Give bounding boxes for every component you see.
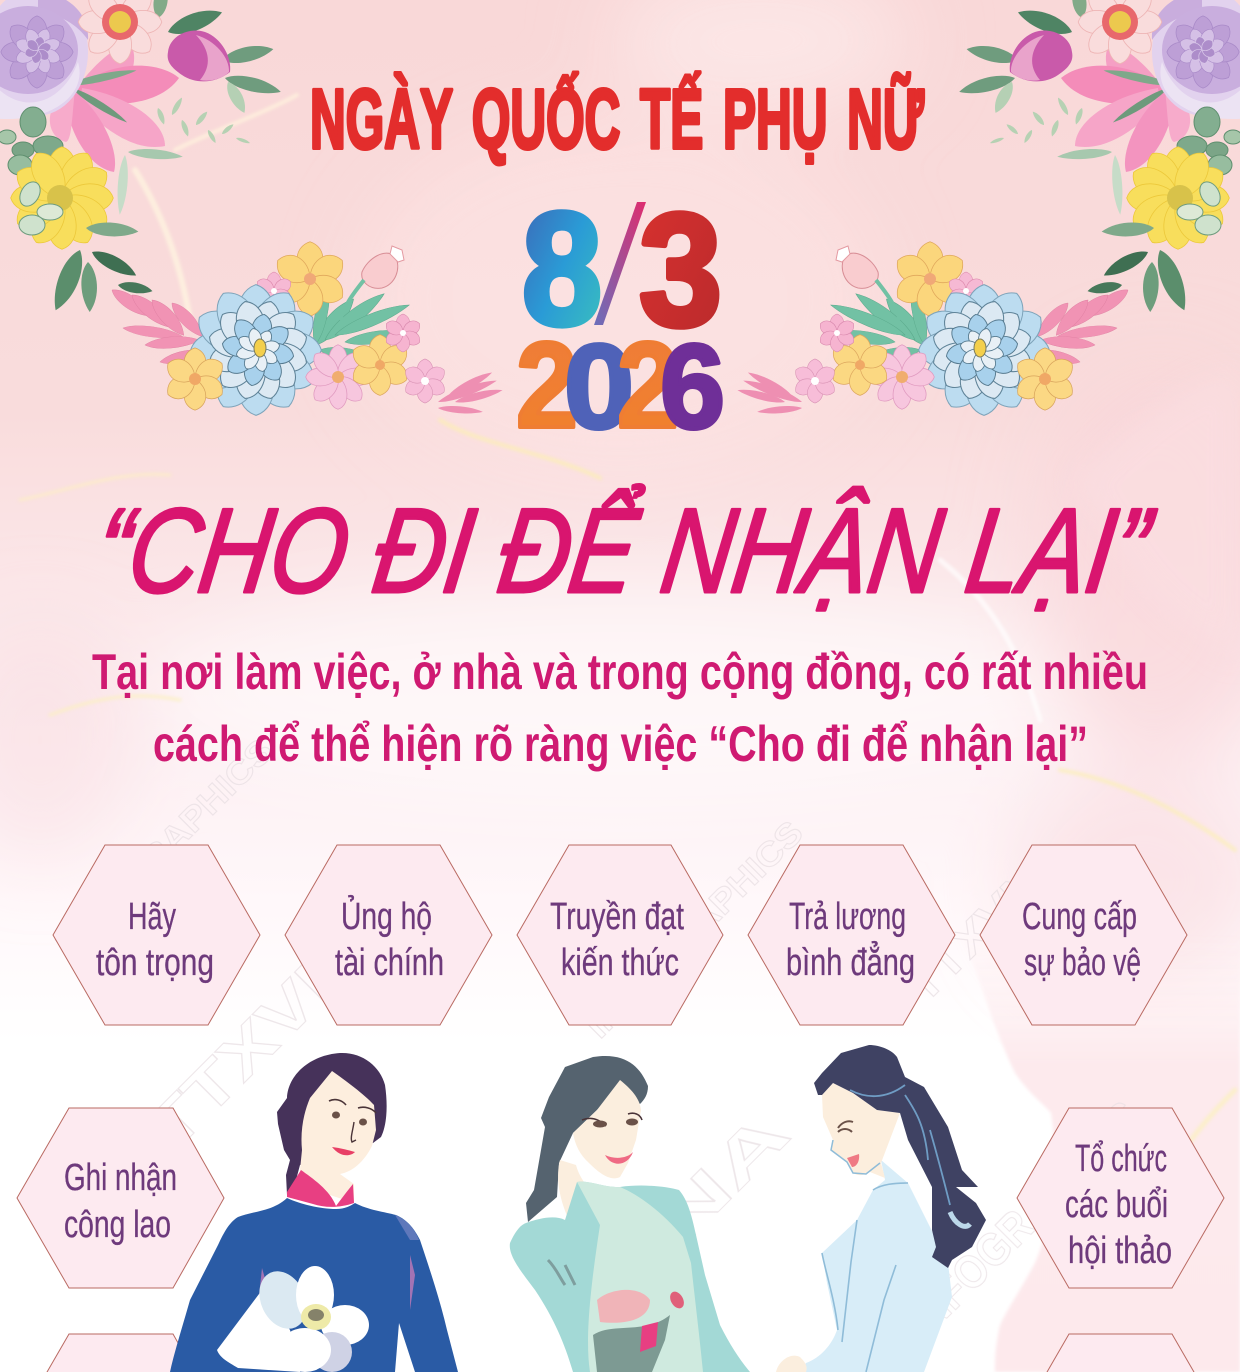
watermarks: TTXVN xyxy=(133,925,373,1165)
hexagon: lower left (cropped) xyxy=(17,1334,224,1372)
hexagon: Tổ chức các buổi hội thảo: các buổi xyxy=(1065,1184,1168,1226)
hexagon: Hãy tôn trọng xyxy=(53,845,260,1025)
hexagon: Tổ chức các buổi hội thảo: hội thảo xyxy=(1068,1230,1172,1272)
soft right blob in lower area xyxy=(960,930,1240,1372)
hexagon: Cung cấp sự bảo vệ: Cung cấp xyxy=(1022,896,1137,938)
floral corner: top right xyxy=(957,0,1240,314)
woman in teal ao dai xyxy=(510,1056,750,1372)
floral bouquet: right xyxy=(737,242,1132,416)
date emblem: 8/3 2026: 6 xyxy=(660,320,725,454)
hexagon: Ghi nhận công lao xyxy=(17,1108,224,1288)
hexagon: Trả lương bình đẳng: bình đẳng xyxy=(786,940,915,984)
date emblem: 8/3 2026: 3 xyxy=(639,180,722,359)
hexagon: Ghi nhận công lao: Ghi nhận xyxy=(64,1157,177,1199)
hexagon: Ủng hộ tài chính: Ủng hộ xyxy=(341,894,432,938)
hexagon: Tổ chức các buổi hội thảo: Tổ chức xyxy=(1075,1138,1167,1180)
hexagon: Cung cấp sự bảo vệ xyxy=(980,845,1187,1025)
date emblem: 8/3 2026 xyxy=(516,179,725,454)
hexagon: Hãy tôn trọng: tôn trọng xyxy=(96,942,214,984)
watermarks: TTXVN xyxy=(897,857,1052,1012)
woman in light blue ao dai xyxy=(776,1045,986,1372)
hexagon: Cung cấp sự bảo vệ: sự bảo vệ xyxy=(1024,942,1141,984)
date emblem: 8/3 2026: 8 xyxy=(522,179,602,358)
watermarks xyxy=(49,732,1151,1347)
hexagon: Ủng hộ tài chính: tài chính xyxy=(335,942,444,984)
floral corner: top left xyxy=(0,0,283,314)
hexagon: Trả lương bình đẳng: Trả lương xyxy=(789,896,906,938)
hexagon: Tổ chức các buổi hội thảo xyxy=(1017,1108,1224,1288)
watermarks: INFOGRAPHICS xyxy=(49,732,281,964)
gold veins xyxy=(20,95,1235,1170)
date emblem: 8/3 2026: 2 xyxy=(617,317,679,453)
watermarks: INFOGRAPHICS xyxy=(895,1091,1151,1347)
watermarks: NA xyxy=(641,1098,803,1260)
floral bouquet: left xyxy=(108,242,503,416)
hexagon: Truyền đạt kiến thức: kiến thức xyxy=(561,942,679,984)
hexagon: lower right (cropped) xyxy=(1017,1334,1224,1372)
hexagon: Ủng hộ tài chính xyxy=(285,845,492,1025)
lotus bouquet xyxy=(217,1264,369,1372)
hexagon: Trả lương bình đẳng xyxy=(748,845,955,1025)
date emblem: 8/3 2026: 0 xyxy=(564,320,634,454)
hexagon: Ghi nhận công lao: công lao xyxy=(64,1204,171,1246)
subtitle xyxy=(92,644,1148,772)
hexagon: Hãy tôn trọng: Hãy xyxy=(128,896,176,938)
date emblem: 8/3 2026: 2 xyxy=(516,317,578,453)
watermarks: INFOGRAPHICS xyxy=(579,814,811,1046)
face details xyxy=(329,1100,376,1113)
hexagon: Truyền đạt kiến thức: Truyền đạt xyxy=(550,896,684,938)
woman in blue ao dai xyxy=(170,1053,458,1372)
hexagon: Truyền đạt kiến thức xyxy=(517,845,723,1025)
